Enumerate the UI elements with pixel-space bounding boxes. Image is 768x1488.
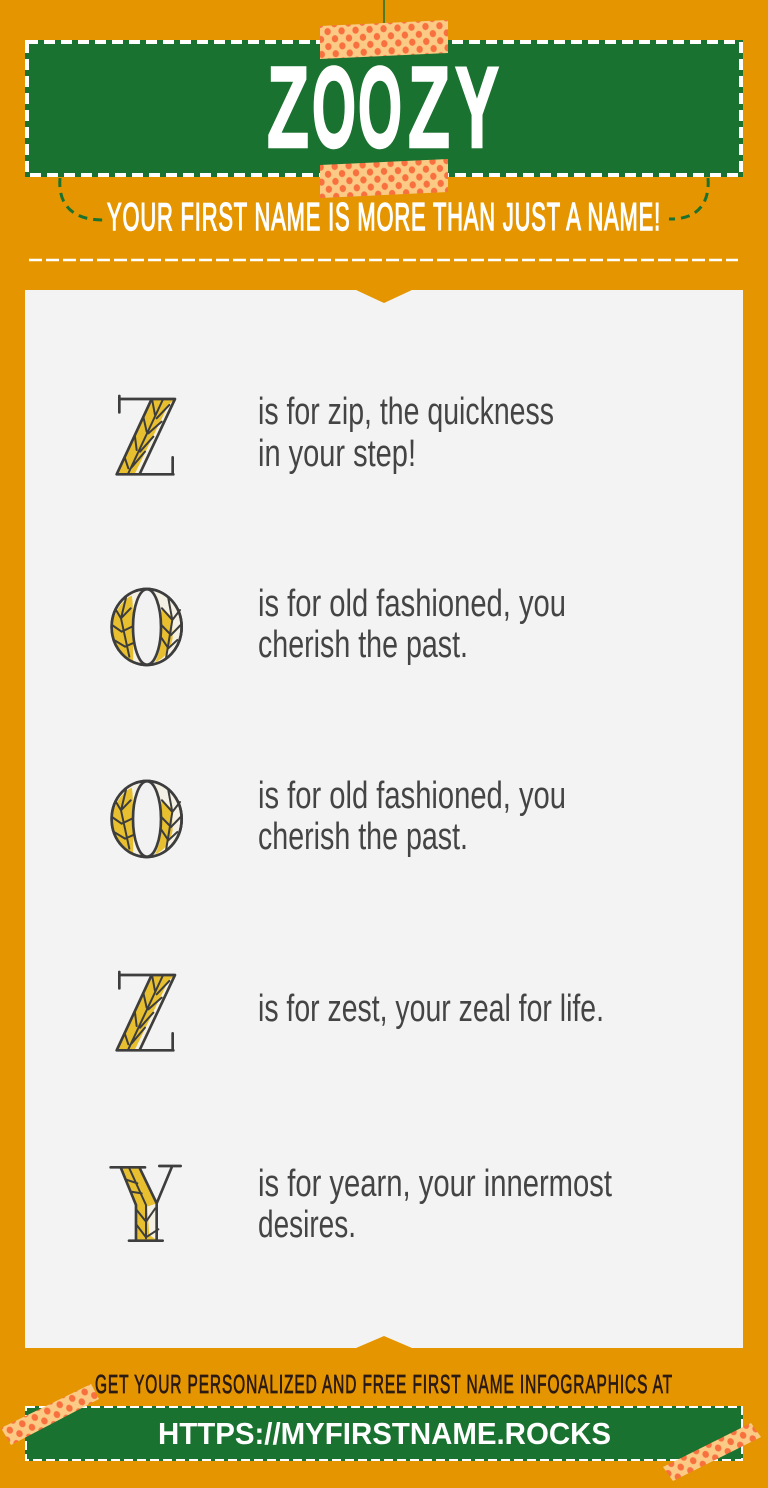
text: second Z meaning: is for zest, your zeal for life. — [258, 988, 604, 1030]
title: Y — [455, 44, 499, 172]
panel: letter meanings — [25, 290, 743, 1348]
icon: letter O — [112, 589, 182, 665]
notch: bottom — [356, 1336, 412, 1348]
bracket: right — [669, 178, 708, 219]
title: O — [312, 44, 356, 172]
panel: title banner — [25, 40, 743, 177]
title: Z — [408, 44, 450, 172]
text: Z meaning: in your step! — [258, 433, 416, 475]
text: Y meaning: is for yearn, your innermost — [258, 1163, 612, 1205]
row: O old fashioned second — [112, 775, 566, 858]
bracket: left — [60, 178, 103, 220]
icon: letter Y — [111, 1166, 181, 1241]
text: O meaning: is for old fashioned, you — [258, 583, 566, 625]
text: Z meaning: is for zip, the quickness — [258, 391, 554, 433]
tape: top — [320, 20, 448, 59]
row: Z zest — [117, 972, 604, 1050]
row: O old fashioned — [112, 583, 566, 666]
icon: letter Z second — [117, 972, 175, 1050]
text: second O meaning: is for old fashioned, you — [258, 775, 566, 817]
tape: bottom — [320, 159, 448, 198]
url text: HTTPS://MYFIRSTNAME.ROCKS — [158, 1416, 611, 1451]
icon: letter O second — [112, 781, 182, 857]
tape: footer right — [663, 1423, 761, 1481]
text: Y meaning: desires. — [258, 1204, 356, 1246]
title: Z — [267, 44, 309, 172]
dashed separator — [29, 259, 738, 261]
tape: footer left — [1, 1384, 99, 1445]
panel: url banner — [25, 1406, 743, 1461]
notch: top — [356, 290, 412, 303]
icon: letter Z — [117, 396, 175, 474]
row: Z zip — [117, 391, 554, 475]
header hanging line — [383, 0, 385, 24]
text: second O meaning: cherish the past. — [258, 816, 468, 858]
title: O — [358, 44, 402, 172]
text: O meaning: cherish the past. — [258, 624, 468, 666]
row: Y yearn — [111, 1163, 612, 1246]
